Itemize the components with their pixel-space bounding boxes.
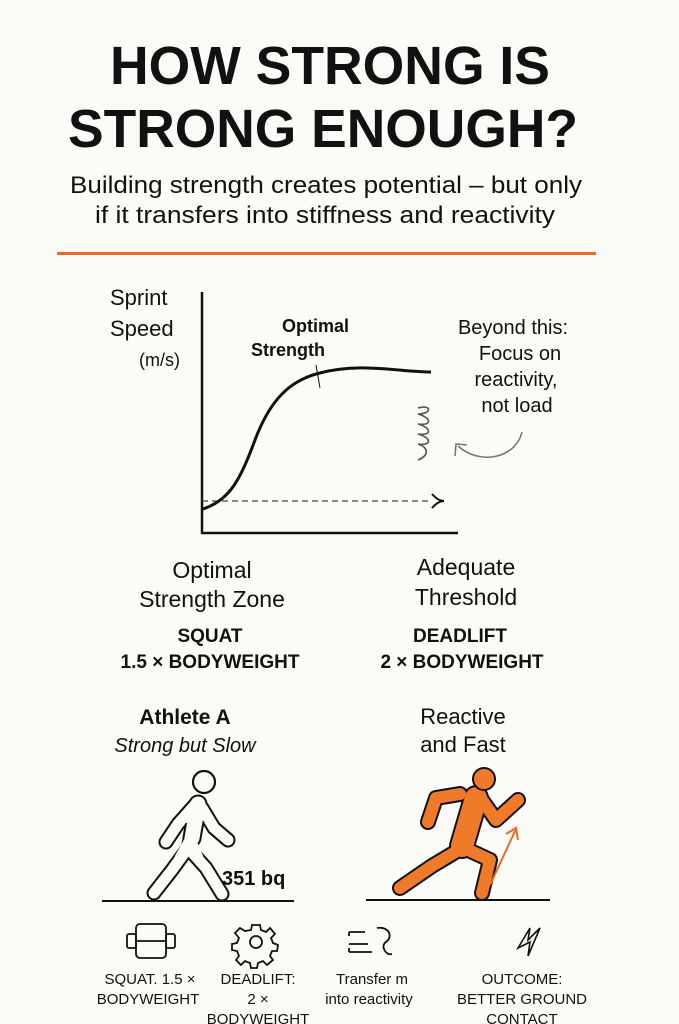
- y-axis label: [110, 285, 180, 370]
- labels: bottom row: Transfer m: [336, 971, 408, 988]
- heading: reactive and fast: Reactive: [420, 704, 506, 729]
- heading: athlete A: [114, 706, 257, 757]
- heading: reactive and fast: [420, 704, 506, 757]
- panel: adequate threshold: Adequate: [417, 554, 515, 580]
- panel: adequate threshold: 2 × BODYWEIGHT: [380, 652, 544, 673]
- label: 351 bq: 351 bq: [222, 868, 285, 890]
- subtitle: [70, 172, 582, 229]
- annotation: Beyond this:: [458, 317, 568, 339]
- icon: running figure: [400, 768, 518, 893]
- panel: optimal strength zone: 1.5 × BODYWEIGHT: [121, 652, 300, 673]
- labels: bottom row: SQUAT. 1.5 ×: [104, 971, 196, 988]
- panel: optimal strength zone: [121, 557, 300, 673]
- icon: gear: [232, 925, 278, 968]
- panel: adequate threshold: [380, 554, 544, 673]
- heading: athlete A: Athlete A: [139, 706, 231, 729]
- labels: bottom row: 2 ×: [247, 991, 269, 1008]
- title: HOW STRONG IS: [110, 36, 550, 96]
- annotation: Focus on: [479, 343, 561, 365]
- subtitle: Building strength creates potential – but only: [70, 172, 582, 199]
- optimal strength label: Strength: [251, 340, 325, 360]
- icon: spring: [418, 407, 428, 460]
- optimal strength label: Optimal: [282, 316, 349, 336]
- panel: optimal strength zone: Strength Zone: [139, 586, 285, 612]
- labels: bottom row: OUTCOME:: [482, 971, 562, 988]
- panel: optimal strength zone: Optimal: [172, 557, 252, 583]
- title: [68, 36, 578, 159]
- subtitle: if it transfers into stiffness and reactivity: [95, 202, 555, 229]
- annotation: not load: [481, 395, 553, 417]
- curve: [203, 368, 431, 509]
- y-axis label: Sprint: [110, 285, 167, 310]
- labels: bottom row: BODYWEIGHT: [97, 991, 199, 1008]
- heading: reactive and fast: and Fast: [420, 732, 506, 757]
- annotation: reactivity,: [475, 369, 557, 391]
- arrow: orange upward: [490, 828, 518, 885]
- chart: sprint speed vs strength: [110, 285, 568, 533]
- annotation: [458, 317, 568, 417]
- labels: bottom row: [97, 971, 587, 1024]
- arrow: curved: [455, 432, 522, 457]
- panel: optimal strength zone: SQUAT: [177, 626, 243, 647]
- heading: athlete A: Strong but Slow: [114, 735, 257, 757]
- panel: adequate threshold: DEADLIFT: [413, 626, 507, 647]
- optimal strength label: [251, 316, 349, 388]
- panel: adequate threshold: Threshold: [415, 584, 517, 610]
- labels: bottom row: into reactivity: [325, 991, 413, 1008]
- title: STRONG ENOUGH?: [68, 99, 578, 159]
- icon: walking figure: [154, 771, 228, 894]
- y-axis label: (m/s): [139, 350, 180, 370]
- icon: squat: [127, 924, 175, 958]
- dashed baseline arrow: [202, 494, 444, 508]
- labels: bottom row: BETTER GROUND: [457, 991, 587, 1008]
- y-axis label: Speed: [110, 316, 174, 341]
- icon: transfer: [349, 928, 392, 954]
- labels: bottom row: DEADLIFT:: [220, 971, 296, 988]
- icon: lightning: [518, 928, 540, 956]
